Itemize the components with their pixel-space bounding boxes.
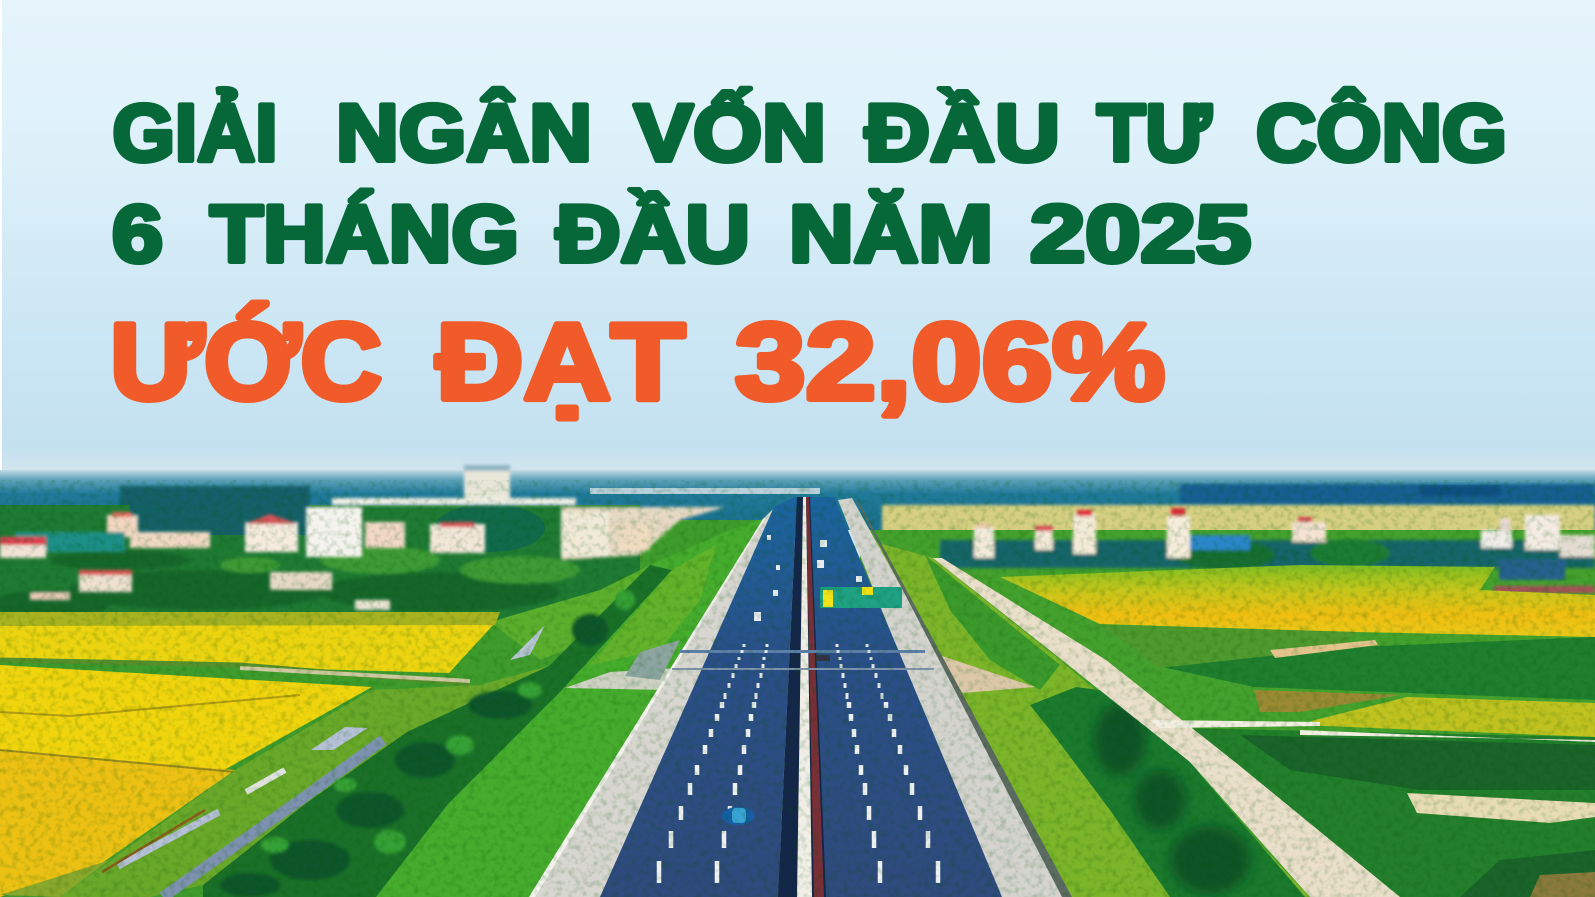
lane markings near	[659, 702, 938, 883]
vehicles: distant traffic	[754, 535, 862, 661]
lower right rice field	[1300, 697, 1595, 737]
left tree belt	[0, 504, 650, 660]
photo texture	[0, 480, 1595, 897]
right carriageway	[808, 497, 1002, 897]
headline figure: 32,06%	[735, 301, 1165, 423]
triangular dirt patch	[933, 653, 1035, 693]
highway	[529, 497, 1072, 897]
left hedge	[203, 565, 672, 897]
left embankment grass	[376, 519, 763, 897]
title line 1: VỐN	[634, 88, 826, 178]
left village	[0, 465, 725, 610]
left concrete shoulder	[529, 510, 785, 897]
title line 2	[112, 188, 1251, 280]
headline figure: ĐẠT	[436, 301, 685, 423]
right ground	[860, 505, 1595, 897]
lower right crops	[1180, 728, 1595, 897]
title line 2: ĐẦU	[556, 188, 750, 280]
canals	[102, 625, 545, 897]
title line 2: 2025	[1030, 190, 1251, 280]
right hedge	[1030, 687, 1305, 897]
photo: expressway landscape	[0, 465, 1595, 897]
service road	[933, 558, 1400, 897]
left ground	[0, 520, 780, 897]
title line 1: GIẢI	[112, 88, 278, 178]
title line 2: 6	[112, 190, 163, 280]
upper right rice field	[1000, 565, 1595, 637]
lane markings far	[725, 644, 882, 699]
vehicle: blue car	[722, 807, 754, 825]
title	[110, 88, 1507, 423]
overpass shadow	[680, 650, 925, 653]
title line 1: CÔNG	[1256, 88, 1507, 178]
right concrete shoulder	[838, 498, 1072, 897]
left carriageway	[600, 497, 797, 897]
distant tree line	[0, 470, 1595, 530]
title line 1: ĐẦU	[865, 88, 1060, 178]
highway direction sign	[820, 587, 902, 608]
title line 1: TƯ	[1097, 88, 1212, 178]
grass between highway and service road	[868, 540, 1310, 897]
title line 2: THÁNG	[210, 190, 519, 280]
right field trees and houses	[940, 508, 1595, 593]
headline figure	[110, 301, 1165, 423]
right dark crop field	[1162, 637, 1595, 700]
title line 1: NGÂN	[336, 88, 592, 178]
title line 2: NĂM	[789, 190, 993, 280]
headline figure: ƯỚC	[110, 301, 382, 423]
median	[778, 497, 826, 897]
title line 1	[112, 88, 1507, 178]
left rice fields	[0, 612, 549, 897]
